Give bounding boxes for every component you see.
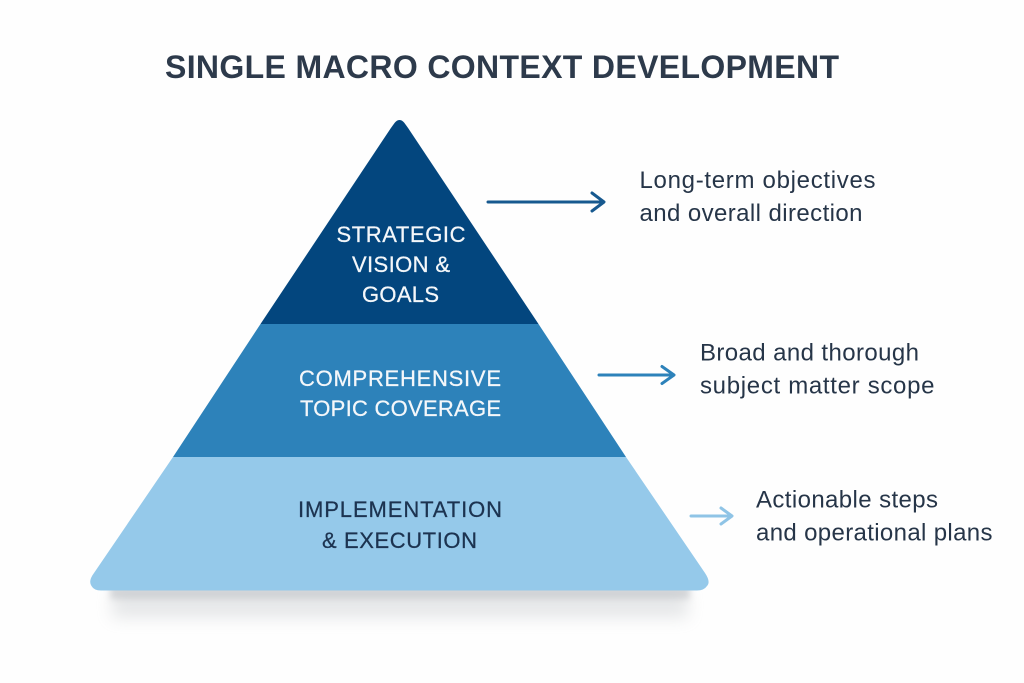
description 1: Long-term objectives — [640, 167, 876, 194]
description 2: Broad and thorough — [700, 340, 919, 366]
tier: implementation: & EXECUTION — [322, 528, 477, 553]
tier: strategic vision: STRATEGIC — [336, 222, 466, 247]
description 3: and operational plans — [756, 520, 992, 546]
arrow 1 — [488, 193, 604, 211]
tier: topic coverage: COMPREHENSIVE — [299, 366, 501, 391]
tier: strategic vision: GOALS — [362, 282, 439, 307]
arrow 2 — [599, 366, 674, 384]
tier: topic coverage — [173, 324, 626, 457]
description 2: subject matter scope — [700, 372, 934, 400]
title: SINGLE MACRO CONTEXT DEVELOPMENT — [165, 49, 839, 85]
tier: strategic vision — [260, 120, 538, 324]
description 3: Actionable steps — [756, 486, 938, 514]
pyramid — [90, 120, 709, 590]
tier: implementation: IMPLEMENTATION — [298, 497, 502, 522]
tier: implementation — [90, 457, 709, 590]
description 1 — [640, 167, 876, 227]
tier: topic coverage: TOPIC COVERAGE — [300, 396, 501, 421]
description 1: and overall direction — [640, 200, 862, 227]
pyramid shadow — [110, 584, 690, 618]
description 3 — [756, 486, 992, 546]
tier: strategic vision: VISION & — [352, 252, 450, 277]
description 2 — [700, 340, 934, 400]
arrow 3 — [691, 508, 732, 524]
